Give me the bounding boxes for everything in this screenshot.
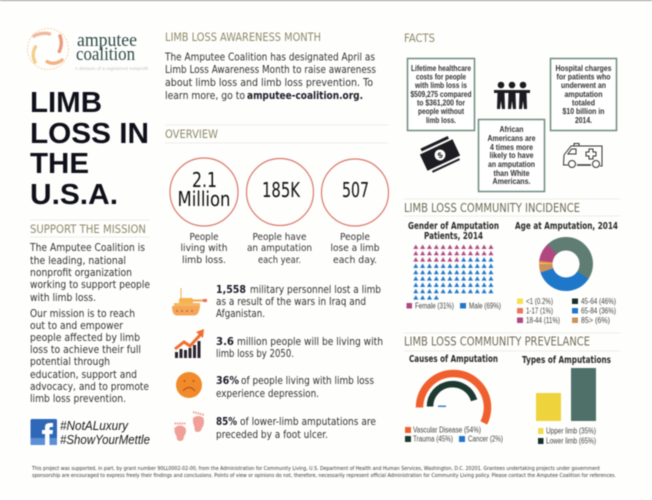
text: awareness month description: about limb loss and limb loss prevention. To (165, 77, 373, 89)
text: military personnel: as a result of the wars in Iraq and (216, 296, 366, 308)
arc: vascular disease (419, 373, 488, 423)
stat: 507: 507 (342, 178, 369, 202)
fact box: hospital charges: for patients who (556, 73, 611, 82)
footnote (31, 466, 616, 479)
legend: age: 45-64 (46%) (581, 297, 616, 306)
heading: limb loss community prevelance: LIMB LOSS COMMUNITY PREVELANCE (404, 334, 590, 348)
chart: types of amputations bars (522, 355, 611, 446)
fact box: African Americans: African (500, 125, 524, 134)
text: depression (216, 375, 374, 400)
text: about the coalition: with limb loss. (30, 292, 96, 304)
fact box: healthcare costs (408, 58, 474, 130)
logo wordmark: amputee (77, 30, 137, 51)
fact box: healthcare costs: people without (418, 107, 464, 116)
heading: facts: FACTS (404, 31, 435, 45)
stat: 507: each day. (333, 255, 377, 266)
fact box: healthcare costs: with limb loss is (414, 81, 467, 90)
stat: 2.1 million (170, 158, 238, 266)
fact box: hospital charges: Hospital charges (556, 64, 612, 73)
fact box: healthcare costs: $509,275 compared (410, 90, 472, 99)
text: about the coalition: out to and empower (30, 320, 124, 332)
legend: causes (405, 426, 503, 444)
text: 3.6 million: limb loss by 2050. (216, 348, 294, 360)
title: THE (30, 148, 89, 180)
stat: 185K: an amputation (247, 243, 312, 254)
text: depression: of people living with limb loss (241, 375, 374, 387)
pictogram grid (412, 244, 494, 301)
text: about the coalition: The Amputee Coalition is (29, 242, 145, 254)
chart: causes of amputation gauge (405, 354, 503, 444)
fact box: hospital charges: amputation (564, 90, 603, 99)
legend: age: 65-84 (36%) (581, 306, 616, 316)
legend: types: Upper limb (35%) (546, 426, 596, 436)
legend: age: 18-44 (11%) (526, 316, 560, 325)
chart title: gender (408, 221, 499, 242)
chart title: types: Types of Amputations (522, 355, 611, 366)
stat: 185K (246, 158, 314, 266)
fact box: African Americans: an amputation (488, 160, 535, 169)
title: LOSS IN (30, 118, 149, 150)
hashtags: #ShowYourMettle (60, 432, 150, 447)
text: foot ulcer: 85% (216, 416, 237, 428)
stat: 2.1 million: People (190, 232, 218, 243)
icon: ambulance (564, 144, 602, 168)
stat: 2.1 million: living with (180, 243, 228, 254)
text: about the coalition: loss to achieve their full (30, 344, 141, 356)
text: awareness month description: Limb Loss Awareness Month to raise awareness (165, 64, 376, 76)
text: about the coalition: the leading, national (30, 255, 126, 267)
icon: money: $ (436, 150, 445, 160)
icon: dotted pinwheel (28, 28, 68, 70)
stat: 2.1 million: Million (178, 187, 230, 211)
fact box: African Americans: Americans. (492, 177, 530, 186)
arc: cancer (438, 406, 446, 407)
arc: trauma (430, 384, 474, 406)
legend: gender: Male (69%) (469, 302, 501, 310)
hashtags (60, 418, 150, 447)
text: about the coalition: potential through (30, 356, 110, 368)
stat: 507 (322, 159, 388, 266)
fact box: African Americans: Americans are (488, 134, 536, 143)
title: LIMB (30, 87, 102, 119)
legend: causes: Cancer (2%) (468, 434, 503, 444)
stat: 185K: each year. (258, 255, 301, 266)
text: 3.6 million: million people will be living with (237, 336, 383, 348)
chart title: gender: Gender of Amputation (408, 221, 499, 232)
stat: 185K: People have (252, 232, 306, 243)
stat: 2.1 million: 2.1 (192, 168, 217, 192)
logo: Amputee Coalition (28, 28, 149, 71)
fact box: healthcare costs: limb loss. (426, 116, 456, 125)
fact box: hospital charges: $10 billion in (562, 107, 605, 116)
text: awareness month description: amputee-coalition.org. (247, 90, 363, 102)
text: military personnel: Afganistan. (216, 308, 265, 320)
title: U.S.A. (30, 179, 118, 211)
legend: age (517, 297, 616, 325)
fact box: healthcare costs: Lifetime healthcare (411, 64, 471, 73)
logo wordmark (76, 30, 137, 65)
text: about the coalition: people affected by limb (30, 332, 140, 344)
text: about the coalition: working to support people (30, 279, 150, 291)
fact box: hospital charges: underwent an (561, 81, 606, 90)
stat: 507: lose a limb (330, 243, 380, 254)
text: about the coalition: limb loss prevention. (30, 393, 126, 405)
text: foot ulcer: preceded by a foot ulcer. (216, 429, 328, 441)
text: military personnel: military personnel lost a limb (250, 284, 381, 296)
text: awareness month description: The Amputee Coalition has designated April as (164, 52, 375, 64)
legend: types (538, 426, 596, 446)
title (30, 87, 149, 211)
text: about the coalition: advocacy, and to promote (30, 381, 149, 393)
hashtags: #NotALuxury (60, 418, 129, 433)
logo wordmark: coalition (76, 44, 135, 65)
fact box: hospital charges (550, 58, 616, 130)
text: 3.6 million: 3.6 (216, 336, 234, 348)
icon: facebook (30, 419, 57, 445)
legend: age: 85> (6%) (581, 316, 610, 325)
legend: gender: Female (31%) (415, 302, 454, 310)
icon: money (418, 135, 462, 174)
stat: 185K: 185K (262, 178, 301, 202)
legend: age: <1 (0.2%) (526, 297, 553, 306)
icon: rising chart (175, 329, 204, 358)
text: about the coalition: nonprofit organization (30, 267, 132, 279)
fact box: hospital charges: 2014. (575, 116, 592, 125)
text: about the coalition: Our mission is to reach (30, 308, 135, 320)
fact box: hospital charges: totaled (572, 99, 595, 108)
bar: upper limb (536, 393, 561, 421)
text: military personnel: 1,558 (216, 284, 246, 296)
text: awareness month description (164, 52, 376, 102)
chart title: gender: Patients, 2014 (424, 231, 483, 242)
bar: lower limb (571, 368, 596, 421)
donut segments (537, 235, 595, 293)
text: awareness month description: learn more, go to (165, 90, 245, 102)
icon: three people (494, 82, 530, 109)
text: depression: experience depression. (216, 388, 319, 400)
text: depression: 36% (216, 375, 239, 387)
icon: sad face (176, 372, 202, 398)
heading: limb loss awareness month: LIMB LOSS AWARENESS MONTH (165, 30, 321, 44)
heading: support the mission: SUPPORT THE MISSION (30, 222, 146, 236)
fact box: African Americans: than White (494, 169, 530, 178)
chart title: age: Age at Amputation, 2014 (515, 221, 618, 232)
text: foot ulcer (216, 416, 376, 441)
text: about the coalition: education, support and (30, 369, 137, 381)
logo tagline: A division of a registered nonprofit (75, 66, 149, 71)
heading: overview: OVERVIEW (165, 127, 218, 141)
icon: footprints (174, 412, 204, 441)
fact box: African Americans: likely to have (490, 151, 534, 160)
legend: age: 1-17 (1%) (526, 306, 553, 316)
legend: causes: Trauma (45%) (413, 434, 453, 444)
legend: types: Lower limb (65%) (546, 436, 596, 446)
chart: gender pictogram (406, 221, 501, 310)
text: military personnel (216, 284, 381, 320)
stat: 507: People (340, 232, 370, 243)
chart title: causes: Causes of Amputation (409, 354, 498, 365)
stat: 2.1 million: limb loss. (182, 255, 226, 266)
chart: age donut (515, 221, 618, 325)
fact box: African Americans: 4 times more (490, 143, 533, 152)
text: foot ulcer: of lower-limb amputations are (240, 416, 376, 428)
heading: limb loss community incidence: LIMB LOSS COMMUNITY INCIDENCE (404, 201, 580, 215)
fact box: healthcare costs: to $361,200 for (417, 99, 465, 108)
icon: tank (172, 288, 207, 316)
text: 3.6 million (216, 336, 383, 360)
fact box: healthcare costs: costs for people (416, 73, 466, 82)
fact box: African Americans (478, 120, 544, 192)
text: about the coalition (29, 242, 150, 405)
legend: gender (406, 302, 501, 310)
legend: causes: Vascular Disease (54%) (413, 426, 481, 434)
